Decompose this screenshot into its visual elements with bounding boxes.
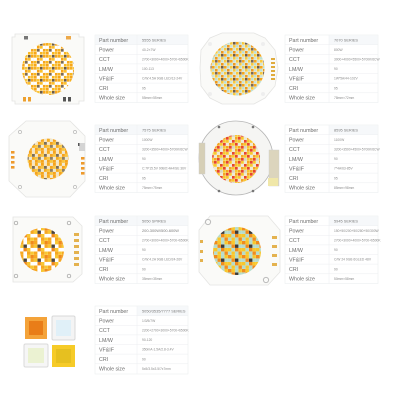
spec table: 5945 series: CRI: [289, 267, 298, 273]
spec table: 5050 series: VF&IF: [99, 257, 115, 263]
spec table: 5050 series: CCT: [99, 238, 111, 244]
spec table: 5945 series: Whole size: [289, 277, 315, 283]
spec table: 5555 series: Part number: [99, 38, 128, 44]
spec table: 8595 series: 3200+3500+4500+5700K/6CW: [334, 148, 380, 152]
LED chip: cool white: [52, 316, 75, 340]
spec table: 7070 series: CCT: [289, 57, 301, 63]
spec table: 5945 series: 50mm×58mm: [334, 277, 354, 281]
spec table: 5945 series: C/W 24 9GB 6GLED 48V: [334, 258, 372, 262]
spec table: 8595 series: CCT: [289, 147, 301, 153]
spec table: 8595 series: 1100W: [334, 138, 345, 142]
spec table: 5945 series: 90: [334, 248, 338, 252]
spec table: 5050 series: 90: [142, 267, 146, 271]
spec table: 5945 series: LM/W: [289, 248, 303, 254]
spec table: 5555 series: 2700+3000+4000+5700+6500K: [142, 58, 189, 62]
spec table: 5050 series: C/W:4.2A 9GB LED/24-26V: [142, 258, 183, 262]
spec table: 5945 series: CCT: [289, 238, 301, 244]
LED board: 7070 series: [200, 33, 278, 104]
LED board: 8595 series: [199, 121, 279, 195]
spec table: 7575 series: C:7P15.5V 90BO:4A4/SE 36V: [142, 167, 187, 171]
spec table: 7575 series: Part number: [99, 128, 128, 134]
spec table: 7070 series: 90: [334, 67, 338, 71]
spec table: 5050/3535/7777 series: 1/3/5/7W: [142, 319, 156, 323]
spec table: 7575 series: Whole size: [99, 186, 125, 192]
spec table: 5945 series: 2700+3000+4000+5700+6500K: [334, 238, 381, 242]
spec table: 5050 series: [95, 216, 189, 284]
LED board: 5555 series: [12, 34, 84, 104]
spec table: 5945 series: 90: [334, 267, 338, 271]
spec table: 5050 series: Part number: [99, 219, 128, 225]
spec table: 8595 series: 85mm×98mm: [334, 186, 354, 190]
spec table: 7070 series: LM/W: [289, 67, 303, 73]
spec table: 5555 series: CCT: [99, 57, 111, 63]
spec table: 5050 series: 90: [142, 248, 146, 252]
spec table: 7070 series: 800W: [334, 48, 344, 52]
spec table: 7575 series: [95, 125, 188, 192]
spec table: 5050/3535/7777 series: CRI: [99, 357, 108, 363]
spec table: 5555 series: VF&IF: [99, 76, 115, 82]
spec table: 5050/3535/7777 series: 90-120: [142, 338, 152, 342]
spec table: 7070 series: Power: [289, 48, 304, 54]
spec table: 5050/3535/7777 series: CCT: [99, 328, 111, 334]
spec table: 8595 series: 90: [334, 157, 338, 161]
spec table: 5050/3535/7777 series: 350mA-1.5A/2.8-3.4V: [142, 348, 175, 352]
spec table: 8595 series: CRI: [289, 176, 298, 182]
spec table: 5555 series: 5555 SERIES: [142, 38, 166, 42]
spec table: 5945 series: 5945 SERIES: [334, 218, 358, 224]
spec table: 5555 series: [95, 35, 189, 102]
LED chip: yellow: [52, 345, 75, 367]
spec table: 5050/3535/7777 series: [95, 306, 189, 374]
spec table: 5555 series: LM/W: [99, 67, 113, 73]
spec table: 7070 series: CRI: [289, 86, 298, 92]
spec table: 7575 series: Power: [99, 138, 114, 144]
spec table: 5050 series: LM/W: [99, 248, 113, 254]
spec table: 5050/3535/7777 series: Part number: [99, 309, 128, 315]
spec table: 5050/3535/7777 series: VF&IF: [99, 347, 115, 353]
spec table: 5555 series: 40-2×7W: [142, 48, 156, 52]
spec table: 8595 series: 7*4A/63-85V: [334, 167, 353, 171]
spec table: 5050 series: 200-300W/500-600W: [142, 228, 179, 233]
spec table: 8595 series: Whole size: [289, 186, 315, 192]
LED chip: orange: [25, 317, 47, 339]
spec table: 8595 series: 8595 SERIES: [334, 128, 358, 132]
spec table: 5050/3535/7777 series: 90: [142, 357, 146, 361]
spec table: 5050/3535/7777 series: 5050/3535/7777 SERIES: [142, 308, 186, 314]
spec table: 5555 series: 95: [142, 86, 146, 90]
spec table: 7070 series: Part number: [289, 38, 318, 44]
spec table: 8595 series: 95: [334, 176, 338, 180]
LED board: 5050 series: [13, 217, 82, 282]
LED chip: warm white: [24, 344, 48, 367]
spec table: 7070 series: 1W*5A/44-102V: [334, 77, 358, 81]
spec table: 5555 series: 100-113: [142, 67, 154, 71]
spec table: 5555 series: Whole size: [99, 96, 125, 102]
spec table: 5555 series: C/W:4.5A 9GB LED/12-24V: [142, 77, 183, 81]
spec table: 7575 series: LM/W: [99, 157, 113, 163]
spec table: 5945 series: 150+50/200+50/280+50/300W: [334, 229, 380, 233]
spec table: 5555 series: Power: [99, 48, 114, 54]
spec table: 8595 series: Part number: [289, 128, 318, 134]
spec table: 7575 series: 90: [142, 157, 146, 161]
spec table: 5050/3535/7777 series: Power: [99, 319, 114, 325]
spec table: 5555 series: 55mm×55mm: [142, 96, 162, 100]
spec table: 5555 series: CRI: [99, 86, 108, 92]
spec table: 5945 series: Part number: [289, 219, 318, 225]
spec table: 5050/3535/7777 series: Whole size: [99, 367, 125, 373]
spec table: 7070 series: 95: [334, 86, 338, 90]
spec table: 8595 series: LM/W: [289, 157, 303, 163]
spec table: 5945 series: [285, 216, 381, 284]
spec table: 5050 series: 2700+3000+4000+5700+6500K: [142, 238, 189, 242]
spec table: 5050 series: CRI: [99, 267, 108, 273]
spec table: 7070 series: 7070 SERIES: [334, 38, 358, 42]
spec table: 7070 series: [285, 35, 380, 102]
spec table: 7070 series: VF&IF: [289, 76, 305, 82]
spec table: 7575 series: CRI: [99, 176, 108, 182]
spec table: 7575 series: 95: [142, 176, 146, 180]
spec table: 8595 series: Power: [289, 138, 304, 144]
spec table: 7575 series: 7575 SERIES: [142, 128, 166, 132]
spec table: 7070 series: 3000+4000+5500+5700K/6CW: [334, 58, 380, 62]
spec table: 7575 series: VF&IF: [99, 166, 115, 172]
spec table: 5945 series: Power: [289, 229, 304, 235]
LED board: 7575 series: [9, 121, 85, 197]
spec table: 5050/3535/7777 series: 2200+2700+3000+5700+6500K: [142, 328, 189, 332]
spec table: 7575 series: 75mm×75mm: [142, 186, 162, 190]
spec table: 5050/3535/7777 series: 5x5/3.5x3.5/7x7mm: [142, 367, 171, 371]
spec table: 7575 series: 3200+3500+4000+5700K/6CW: [142, 148, 188, 152]
spec table: 8595 series: VF&IF: [289, 166, 305, 172]
spec table: 5050 series: 5050 SPIRES: [142, 218, 166, 224]
spec table: 7070 series: Whole size: [289, 96, 315, 102]
spec table: 5050 series: Power: [99, 229, 114, 235]
spec table: 8595 series: [285, 125, 380, 192]
spec table: 5945 series: VF&IF: [289, 257, 305, 263]
spec table: 7575 series: 1000W: [142, 138, 153, 142]
spec table: 5050 series: 35mm×35mm: [142, 277, 162, 281]
spec table: 5050/3535/7777 series: LM/W: [99, 338, 113, 344]
LED board: 5945 series: [199, 216, 280, 285]
spec table: 7575 series: CCT: [99, 147, 111, 153]
spec table: 7070 series: 78mm×72mm: [334, 96, 354, 100]
spec table: 5050 series: Whole size: [99, 277, 125, 283]
